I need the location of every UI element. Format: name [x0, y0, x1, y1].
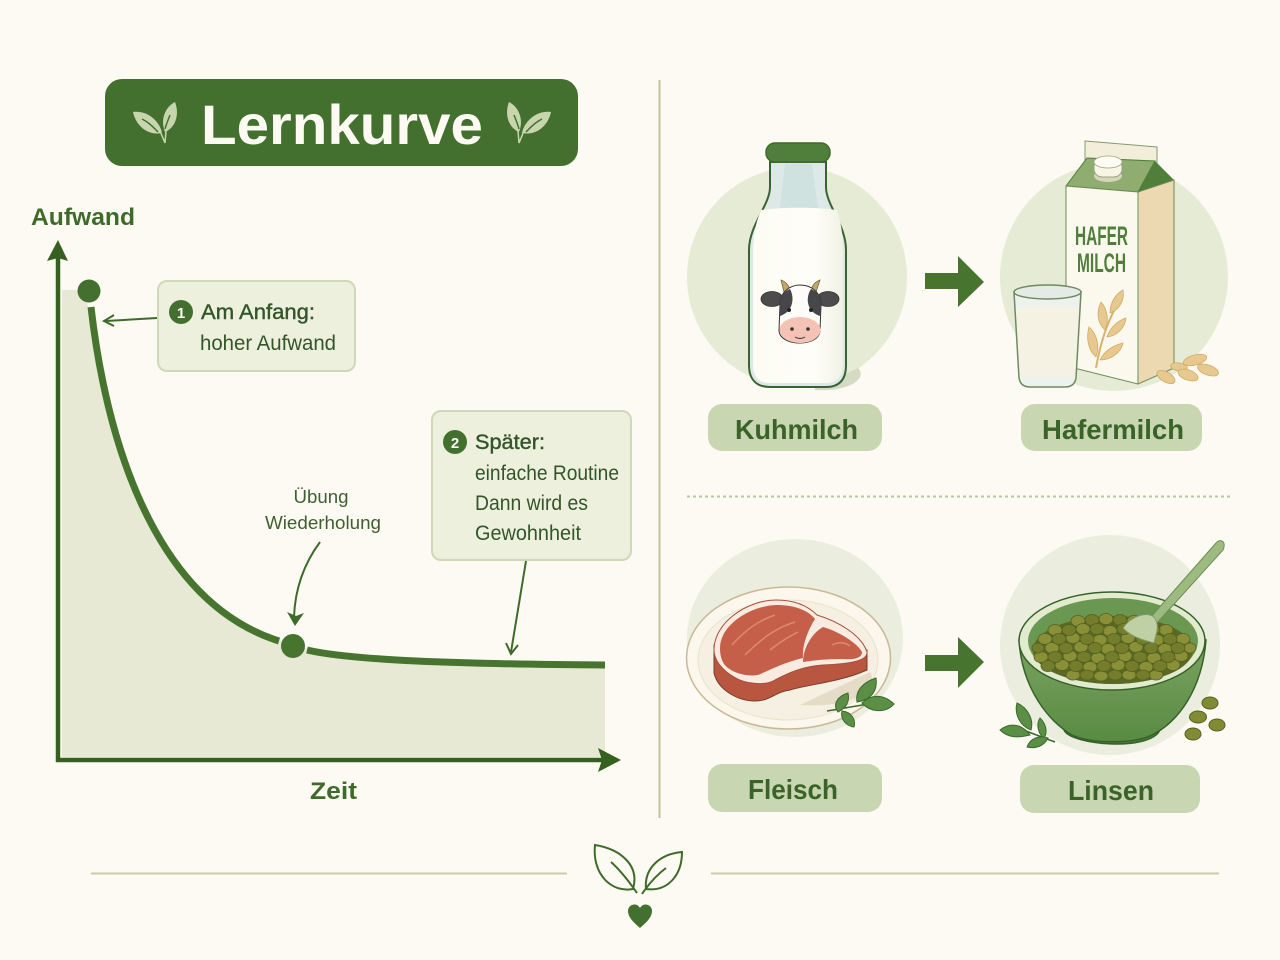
y axis label: Aufwand: [31, 204, 135, 231]
callout 2 body: einfache Routine: [475, 462, 619, 485]
icon: oat sprig: [1088, 290, 1126, 368]
arrow: to start: [104, 315, 157, 326]
label: Hafermilch: Hafermilch: [1042, 414, 1184, 445]
practice label: [265, 487, 381, 533]
label: Hafermilch: [1021, 404, 1202, 451]
practice label: Übung: [294, 487, 348, 507]
icon: cow face: [761, 280, 839, 343]
arrow: milk swap: [925, 256, 984, 307]
icon: footer leaves and heart: [595, 845, 682, 928]
label: Linsen: Linsen: [1068, 775, 1154, 806]
badge 2: 2: [451, 435, 459, 452]
badge 2: [443, 430, 467, 454]
x axis label: Zeit: [310, 778, 357, 805]
y axis arrow: [47, 240, 68, 762]
icon: milk bottle: [687, 143, 907, 390]
icon: spoon: [1123, 541, 1224, 643]
practice label: Wiederholung: [265, 513, 381, 533]
arrow: callout 2 to curve: [506, 561, 526, 654]
callout 2: [432, 411, 631, 560]
callout 2 body: [475, 462, 619, 545]
panel: protein: [686, 535, 1225, 813]
label: Kuhmilch: [708, 404, 882, 451]
callout 1: [158, 281, 355, 371]
label: Fleisch: [708, 764, 882, 812]
icon: oat milk carton and glass: [1000, 141, 1228, 391]
title text: Lernkurve: [201, 93, 483, 156]
carton text: HAFER: [1075, 221, 1128, 251]
label: Linsen: [1020, 765, 1200, 813]
label: Fleisch: Fleisch: [748, 774, 838, 805]
panel: milk: [687, 141, 1228, 451]
icon: lentil bowl: [1000, 535, 1225, 755]
badge 1: 1: [177, 305, 185, 322]
callout 1 heading: Am Anfang:: [201, 301, 315, 324]
label: Kuhmilch: Kuhmilch: [735, 414, 858, 445]
start point: [78, 280, 100, 302]
icon: herb sprig: [827, 678, 894, 727]
arrow: practice to mid point: [287, 542, 320, 626]
icon: steak on plate: [686, 539, 903, 737]
icon: glass of oat milk: [1014, 285, 1081, 387]
callout 2 body: Dann wird es: [475, 492, 588, 515]
arrow: protein swap: [925, 637, 984, 688]
carton text: [1075, 221, 1128, 278]
icon: left title leaves: [133, 102, 177, 143]
callout 2 heading: Später:: [475, 431, 545, 454]
lentils: [1032, 614, 1196, 684]
callout 1 body: hoher Aufwand: [200, 332, 336, 355]
title banner: [105, 79, 578, 166]
x axis arrow: [56, 748, 621, 772]
chart area fill: [62, 290, 605, 757]
mid point: [281, 634, 305, 658]
icon: herb sprig: [1000, 703, 1055, 748]
carton text: MILCH: [1077, 248, 1126, 278]
curve line: [91, 307, 605, 665]
badge 1: [169, 300, 193, 324]
icon: oat grains: [1155, 352, 1220, 386]
chart: learning curve: [31, 204, 631, 805]
icon: loose lentils: [1185, 697, 1225, 740]
icon: right title leaves: [507, 102, 551, 143]
callout 2 body: Gewohnheit: [475, 522, 581, 545]
